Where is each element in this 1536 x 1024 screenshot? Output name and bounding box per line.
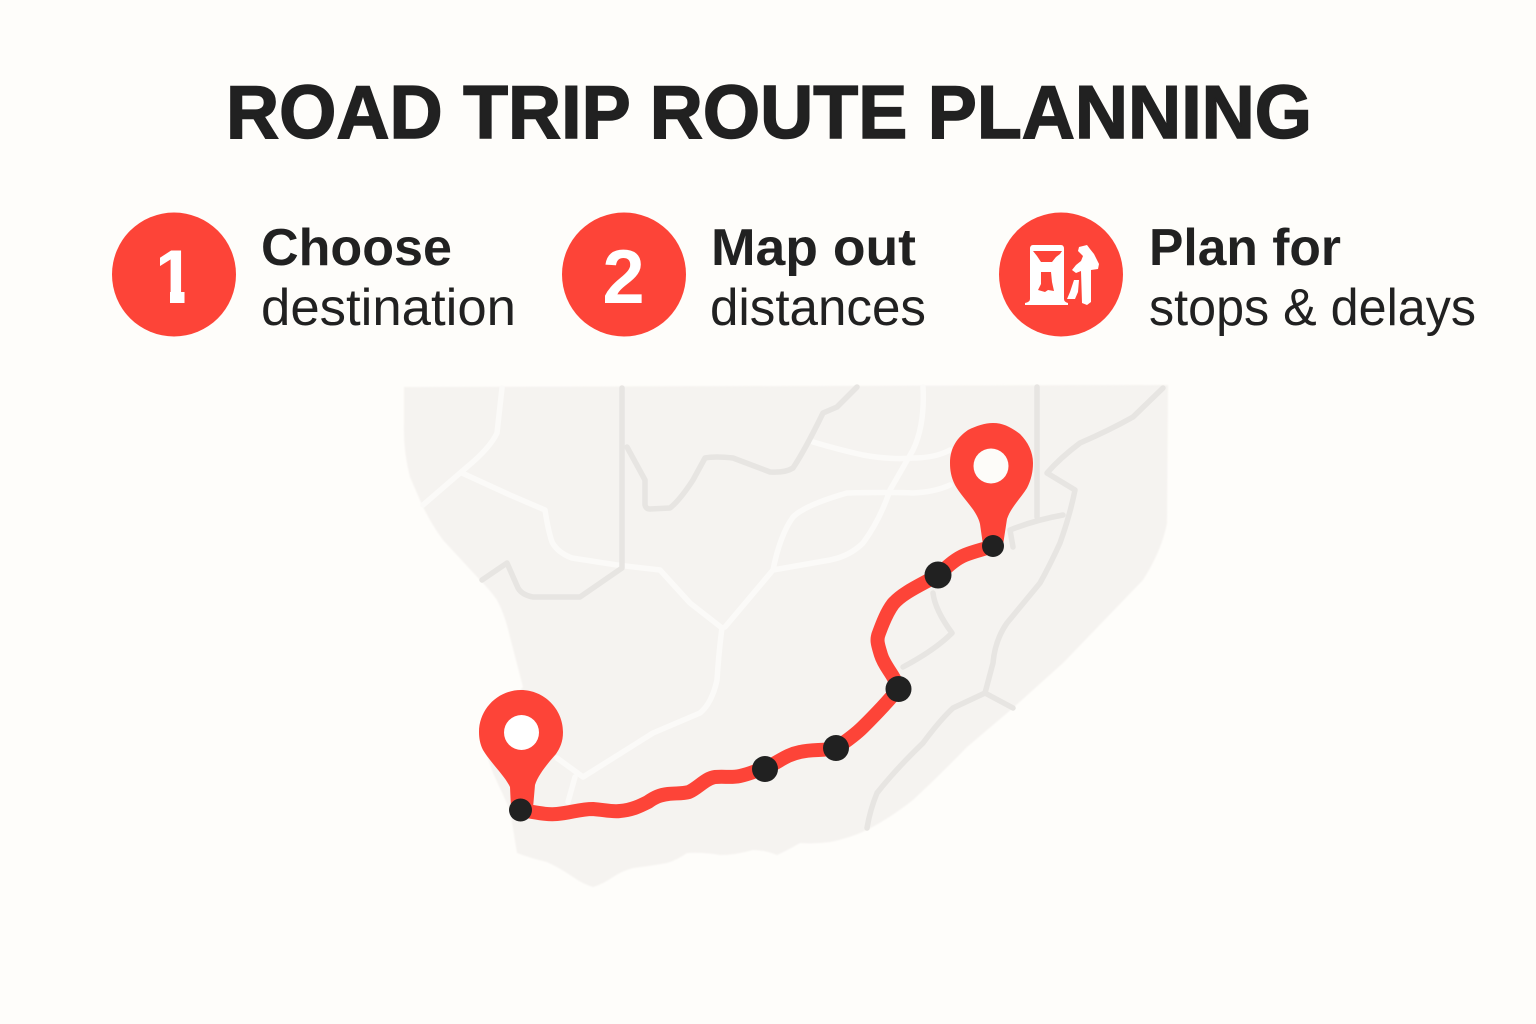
step 2 label: Map out [711, 219, 916, 277]
title: ROAD TRIP ROUTE PLANNING [226, 70, 1312, 154]
step 3 label: Plan for [1149, 219, 1341, 277]
step 1: choose destination [112, 212, 516, 337]
step 1 label: destination [261, 279, 516, 337]
step 3 fuel pump and person badge [999, 212, 1123, 336]
step 3 label: stops & delays [1149, 279, 1476, 337]
waypoint stops [509, 535, 1004, 822]
light roads [423, 387, 950, 802]
route line [520, 546, 993, 814]
step 2 label: distances [710, 279, 926, 337]
step 2 number badge: 2 [602, 235, 645, 320]
step 1 label [261, 219, 516, 337]
step 3: plan for stops and delays [999, 212, 1476, 337]
land shape [404, 385, 1168, 887]
step 2: map out distances [562, 212, 926, 337]
start pin [479, 690, 563, 808]
step 1 number badge [112, 212, 236, 336]
step 3 label [1149, 219, 1476, 337]
destination pin [950, 423, 1033, 545]
infographic canvas [112, 84, 1474, 886]
step 2 label [710, 219, 926, 337]
route map [404, 385, 1168, 887]
step 2 number badge [562, 212, 686, 336]
step 1 number badge: 1 [153, 235, 195, 320]
step 1 label: Choose [261, 219, 452, 277]
grey roads [482, 387, 1163, 828]
